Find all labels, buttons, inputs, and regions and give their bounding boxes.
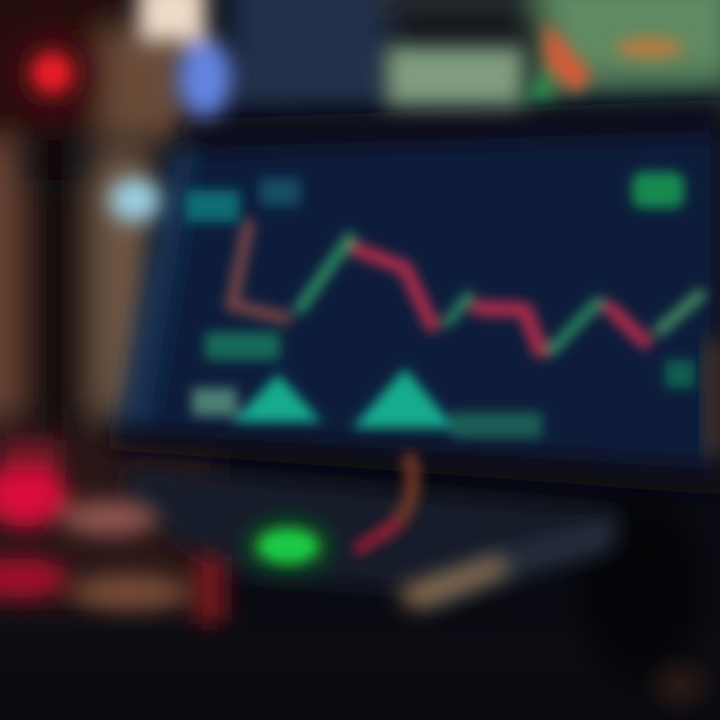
icon: red indicator light bbox=[16, 37, 88, 109]
background orange and green shapes bbox=[520, 20, 684, 100]
green keyboard light bbox=[246, 520, 330, 572]
right edge warm glow bbox=[706, 340, 720, 455]
green marker on screen bbox=[632, 172, 684, 208]
bright window highlights bbox=[109, 0, 525, 222]
monitor panel bbox=[110, 100, 720, 495]
tan keyboard bar bbox=[395, 555, 510, 610]
keyboard / desk bbox=[120, 465, 620, 608]
teal volume peaks bbox=[185, 178, 695, 438]
red glowing foreground bbox=[0, 440, 225, 623]
candlestick line chart bbox=[232, 225, 700, 350]
red and orange cable bbox=[360, 460, 413, 548]
